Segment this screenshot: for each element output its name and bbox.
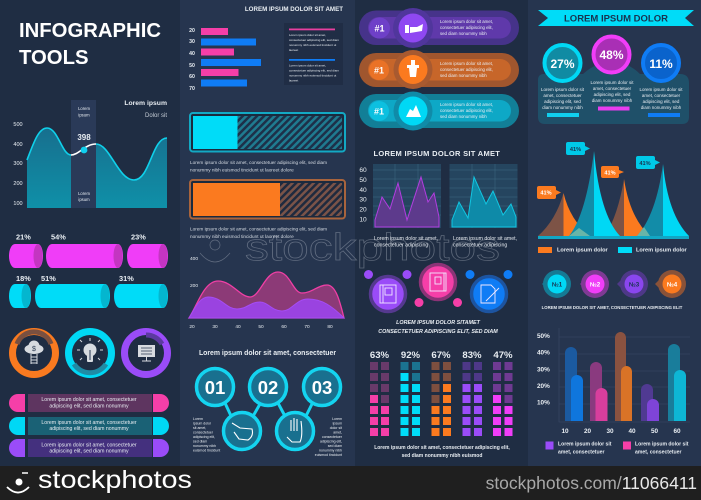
stat panel: adipiscing elit, sed (643, 99, 680, 104)
percentage grid: 92% (401, 350, 421, 361)
twin line charts: 60 (359, 167, 367, 174)
twin line charts: consectetuer adipiscing (374, 242, 428, 248)
ranking pill: purple: #1 (374, 24, 385, 34)
caption: badges: LOREM IPSUM DOLOR SIT AMET, CONSECTETUER ADIPISCING ELIT (542, 305, 683, 310)
watermark: stockphotos (245, 227, 500, 269)
info pill: pink: Lorem ipsum dolor sit amet, consectetuer (41, 397, 137, 403)
column chart: 50% (537, 333, 550, 340)
number badges: №2 (590, 282, 601, 288)
layered area chart: 400 (190, 256, 198, 262)
column chart: 50 (651, 428, 658, 435)
ranking pill: cyan: #1 (374, 106, 384, 116)
area chart: main: 400 (13, 142, 23, 148)
progress bar: orange: Lorem ipsum dolor sit amet, consectetuer adipiscing elit, sed diam (190, 226, 327, 232)
twin line charts: consectetuer adipiscing (453, 242, 507, 248)
horizontal bar chart (189, 28, 261, 92)
twin line charts: 30 (359, 196, 367, 204)
area chart: main: 100 (13, 201, 23, 207)
area chart: main: 200 (13, 181, 23, 187)
step diagram: 01 (205, 377, 225, 398)
cylinder bars: magenta: 21% (16, 232, 31, 242)
legend panel: bars: laoreet (289, 48, 298, 52)
heading: horizontal bars: LOREM IPSUM DOLOR SIT AMET (245, 6, 343, 13)
info pill: purple (9, 439, 169, 457)
twin line charts: 50 (359, 177, 367, 184)
icon: mountain (406, 105, 421, 117)
stat panel: 48% (599, 48, 624, 62)
ranking pill: orange: sed diam nonummy nibh (440, 73, 487, 78)
info pill: purple: Lorem ipsum dolor sit amet, consectetuer (41, 442, 137, 448)
horizontal bar chart: 70 (189, 86, 195, 92)
area chart: main: 500 (13, 122, 23, 128)
info pill: cyan (9, 417, 169, 435)
step diagram: euismod tincidunt (315, 453, 342, 457)
number badges (542, 270, 686, 298)
area chart: main: 300 (13, 161, 23, 167)
heading: steps: Lorem ipsum dolor sit amet, consectetuer (199, 350, 336, 357)
donut icon: presentation board (124, 332, 168, 374)
column chart: 20 (584, 428, 591, 435)
title: TOOLS (19, 47, 88, 69)
ribbon heading: LOREM IPSUM DOLOR (564, 14, 668, 24)
cylinder bars: magenta: 23% (131, 232, 146, 242)
column chart: 30% (537, 366, 550, 374)
step diagram: sit amet, (193, 426, 206, 430)
stat panel: Lorem ipsum dolor sit (590, 80, 634, 85)
stat panel: 27% (550, 57, 575, 71)
step diagram: euismod tincidunt (193, 448, 220, 452)
ranking pill: orange (359, 50, 519, 89)
step diagram: consectetuer (193, 430, 214, 434)
info pill: pink (9, 394, 169, 412)
layered area chart: 50 (258, 324, 264, 330)
footer stock id: stockphotos.com/11066411 (486, 473, 697, 493)
twin line charts: Lorem ipsum dolor sit amet, (453, 236, 517, 242)
area chart: main: Dolor sit (145, 113, 167, 119)
percentage grid: 47% (493, 350, 513, 361)
stat panel: 11% (649, 57, 673, 71)
area chart: main: ipsum (78, 112, 90, 118)
legend panel: bars: nonummy nibh euismod tincidunt ut (289, 43, 336, 47)
ranking pill: purple: consectetuer adipiscing elit, (440, 25, 493, 30)
caption: italic: LOREM IPSUM DOLOR SITAMET (396, 320, 481, 326)
legend panel: bars: consectetuer adipiscing elit, sed diam (289, 38, 339, 42)
legend: mountain chart: Lorem ipsum dolor (557, 248, 608, 254)
number badges: №4 (667, 282, 678, 288)
horizontal bar chart: 60 (189, 74, 195, 80)
column chart: 60 (673, 428, 681, 435)
step diagram: nonummy nibh (319, 448, 342, 452)
progress bar: orange: nonummy nibh euismod tincidunt ut laoreet dolore (190, 234, 294, 239)
icon: hand with bubbles (405, 24, 423, 33)
info pill: purple: adipiscing elit, sed diam nonummy (49, 448, 129, 454)
info pill: pink: adipiscing elit, sed diam nonummy (49, 404, 129, 410)
icon group: three notebooks (364, 264, 512, 312)
mountain chart: 41% (639, 161, 651, 167)
column chart: 10% (537, 400, 550, 406)
caption: italic: CONSECTETUER ADIPISCING ELIT, SED DIAM (378, 329, 498, 335)
step diagram: Lorem (193, 417, 203, 421)
twin line charts: 40 (359, 187, 367, 194)
percentage grid (370, 350, 513, 436)
layered area chart: 60 (281, 324, 287, 330)
stat panel: Lorem ipsum dolor sit (541, 87, 585, 92)
number badges: №3 (629, 282, 640, 288)
progress bar: orange (190, 180, 345, 239)
icon: pointing hand (232, 423, 252, 440)
ranking pill: purple: Lorem ipsum dolor sit amet, (440, 19, 493, 24)
legend: column chart (546, 442, 689, 456)
title: INFOGRAPHIC (19, 20, 161, 42)
caption: grid: Lorem ipsum dolor sit amet, consectetuer adipiscing elit, (374, 445, 510, 451)
progress bar: cyan: nonummy nibh euismod tincidunt ut laoreet dolore (190, 168, 294, 172)
info pill: cyan: adipiscing elit, sed diam nonummy (49, 426, 129, 432)
step diagram: dolor sit (330, 426, 342, 430)
legend: mountain chart: Lorem ipsum dolor (636, 248, 687, 254)
mountain chart: 41% (604, 170, 616, 176)
donut icon: money cloud: $ (32, 346, 36, 353)
ranking pill: purple (359, 8, 519, 48)
stat panel: diam nonummy nibh (542, 105, 583, 110)
layered area chart: 20 (189, 324, 195, 330)
cylinder bars: magenta (9, 232, 168, 268)
stat panel: amet, consectetuer (543, 93, 582, 98)
cylinder bars: cyan (9, 274, 168, 308)
step diagram: adipiscing elit, (193, 435, 215, 439)
column chart: 30 (606, 428, 614, 435)
number badges: №1 (552, 282, 563, 288)
horizontal bar chart: 40 (189, 51, 195, 57)
column chart: 20% (537, 383, 550, 390)
column chart: 40% (537, 350, 550, 356)
title (19, 20, 161, 69)
caption: grid: sed diam nonummy nibh euismod (402, 453, 482, 459)
cylinder bars: cyan: 31% (119, 274, 134, 283)
ranking pill: cyan (359, 92, 519, 130)
twin line charts: 20 (359, 206, 367, 214)
percentage grid: 67% (431, 350, 451, 361)
step diagram: sed diam (193, 440, 207, 444)
progress bar: cyan: Lorem ipsum dolor sit amet, consectetuer adipiscing elit, sed diam (190, 160, 327, 165)
step diagram: ipsum (333, 422, 342, 426)
step diagram: sed diam (328, 444, 342, 448)
step diagram: amet, (333, 430, 342, 434)
legend panel: bars (284, 23, 343, 85)
stat panel: diam nonummy nibh (641, 105, 682, 110)
legend: column chart: amet, consectetuer (558, 450, 604, 456)
ranking pill: cyan: Lorem ipsum dolor sit amet, (440, 102, 493, 107)
ranking pill: purple: sed diam nonummy nibh (440, 31, 487, 36)
icon: open hand (287, 418, 302, 442)
area chart: main: Lorem (78, 191, 90, 196)
icon: podium (407, 60, 419, 77)
ranking pill: orange: consectetuer adipiscing elit, (440, 67, 493, 72)
info pill: cyan: Lorem ipsum dolor sit amet, consectetuer (41, 420, 137, 426)
ranking pill: cyan: consectetuer adipiscing elit, (440, 108, 493, 113)
ranking pill: cyan: sed diam nonummy nibh (440, 114, 487, 119)
step diagram (193, 368, 343, 457)
horizontal bar chart: 20 (189, 28, 195, 34)
area chart: main: Lorem ipsum (124, 100, 167, 107)
stat panel: adipiscing elit, sed (594, 92, 631, 97)
layered area chart: 40 (235, 324, 241, 330)
stat panel: diam nonummy nibh (592, 98, 633, 103)
legend panel: bars: laoreet (289, 78, 298, 82)
legend: column chart: amet, consectetuer (635, 450, 681, 456)
caption: italic (378, 320, 498, 335)
step diagram: ipsum dolor (193, 422, 212, 426)
stat panel: amet, consectetuer (593, 86, 632, 91)
watermark (200, 227, 500, 269)
horizontal bar chart: 50 (189, 63, 195, 69)
step diagram: adipiscing elit, (320, 440, 342, 444)
ribbon heading (538, 10, 694, 26)
stat panel: Lorem ipsum dolor sit (639, 87, 683, 92)
layered area chart: 80 (327, 324, 333, 330)
ranking pill: orange: Lorem ipsum dolor sit amet, (440, 61, 493, 66)
column chart: 40 (628, 428, 636, 435)
twin line charts (359, 164, 518, 248)
donut icon: light bulb (68, 332, 112, 374)
column chart: 10 (561, 428, 569, 435)
legend panel: bars: Lorem ipsum dolor sit amet, (289, 33, 326, 37)
footer bar (0, 466, 701, 500)
twin line charts: 10 (359, 216, 367, 224)
percentage grid: 63% (370, 350, 390, 361)
area chart: main: 398 (77, 133, 91, 142)
step diagram: Lorem (332, 417, 342, 421)
horizontal bar chart: 30 (189, 39, 195, 45)
percentage grid: 83% (462, 350, 482, 361)
step diagram: 02 (258, 377, 278, 398)
area chart: main: Lorem (78, 106, 90, 111)
area chart: main: ipsum (78, 197, 90, 202)
legend: column chart: Lorem ipsum dolor sit (635, 442, 689, 448)
layered area chart: 30 (212, 324, 218, 330)
layered area chart: 70 (304, 324, 310, 330)
cylinder bars: magenta: 54% (51, 232, 66, 242)
legend panel: bars: nonummy nibh euismod tincidunt ut (289, 74, 336, 78)
stat panel: adipiscing elit, sed (544, 99, 581, 104)
stat panel (538, 36, 689, 124)
progress bar: cyan (190, 113, 345, 172)
legend panel: bars: consectetuer adipiscing elit, sed diam (289, 68, 339, 72)
mountain chart: 41% (540, 190, 552, 196)
layered area chart: 200 (190, 283, 198, 289)
ranking pill: orange: #1 (374, 66, 384, 76)
footer logo: stockphotos (38, 466, 192, 494)
area chart: main (13, 100, 167, 208)
column chart (537, 328, 690, 435)
legend panel: bars: Lorem ipsum dolor sit amet, (289, 64, 326, 68)
mountain chart: 41% (570, 147, 581, 153)
legend: column chart: Lorem ipsum dolor sit (558, 442, 612, 448)
step diagram: 03 (312, 377, 332, 398)
legend: mountain chart (538, 247, 687, 254)
stat panel: amet, consectetuer (642, 93, 681, 98)
layered area chart (189, 256, 344, 330)
cylinder bars: cyan: 18% (16, 274, 31, 283)
step diagram: consectetuer (322, 435, 343, 439)
donut icon: money cloud (12, 332, 56, 374)
mountain chart (537, 142, 689, 239)
heading: twin charts: LOREM IPSUM DOLOR SIT AMET (374, 149, 500, 158)
twin line charts: Lorem ipsum dolor sit amet, (374, 236, 438, 242)
cylinder bars: cyan: 51% (41, 274, 56, 283)
caption: grid (374, 445, 510, 459)
step diagram: nonummy nibh (193, 444, 216, 448)
